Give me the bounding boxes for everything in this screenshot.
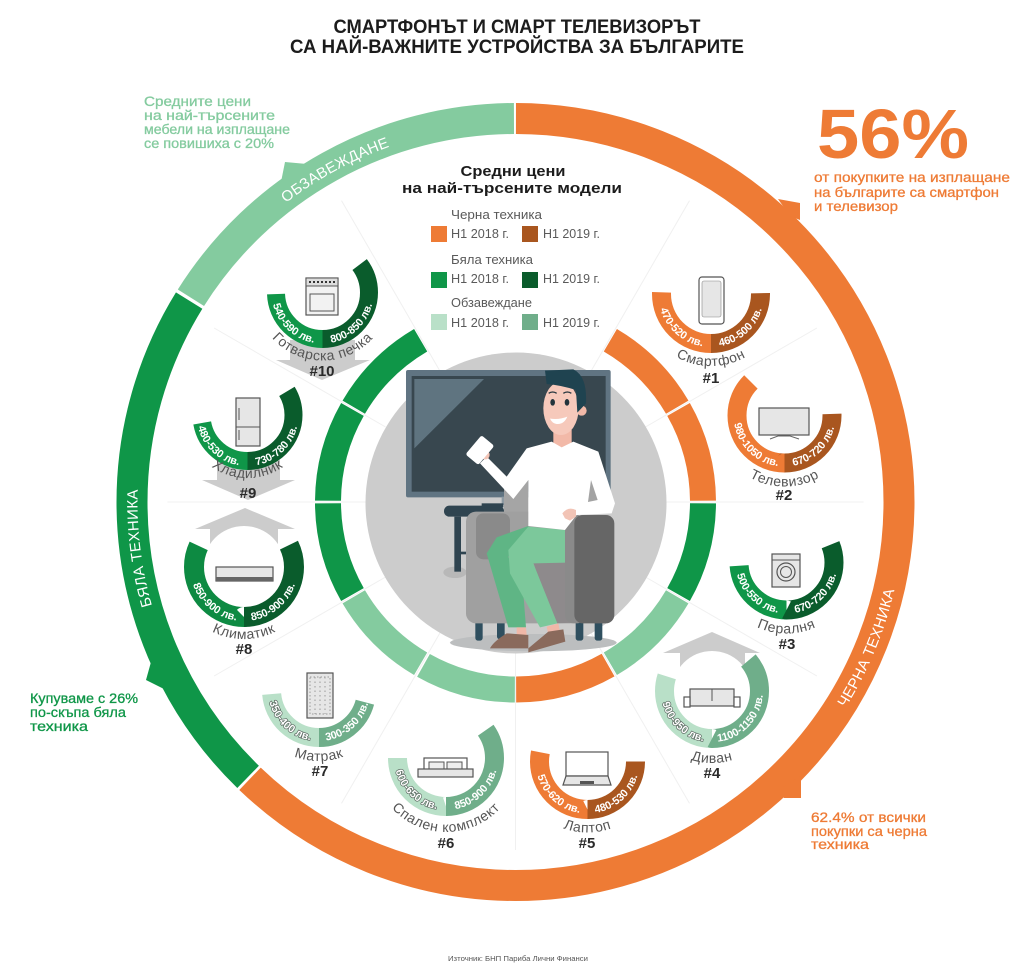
item #8 климатик: 850-900 лв. xyxy=(194,582,236,620)
callout: 26%: техника xyxy=(30,718,88,734)
gray circle backdrop xyxy=(366,352,666,654)
item #4 диван: Диван xyxy=(690,751,732,765)
item #1 смартфон xyxy=(652,276,770,387)
icon: sofa xyxy=(684,689,740,707)
callout: 62.4%: 62.4% от всички xyxy=(811,809,926,825)
legend: обзавеждане xyxy=(431,296,600,330)
item #7 матрак: 300-350 лв. xyxy=(325,704,368,740)
title: СМАРТФОНЪТ И СМАРТ ТЕЛЕВИЗОРЪТ xyxy=(334,17,701,38)
legend: бяла техника: H1 2019 г. xyxy=(543,272,600,286)
inner segmented ring xyxy=(328,314,703,690)
item #8 климатик: Климатик xyxy=(213,623,276,640)
ring segment: черна техника: ЧЕРНА ТЕХНИКА xyxy=(837,590,894,704)
item #6 спален комплект: Спален комплект xyxy=(394,803,498,832)
callout: 26%: Купуваме с 26% xyxy=(30,690,138,706)
legend heading xyxy=(402,163,622,197)
item #6 спален комплект: 600-650 лв. xyxy=(396,768,437,810)
arrow: down xyxy=(276,340,370,380)
title xyxy=(290,17,744,58)
legend heading: на най-търсените модели xyxy=(402,180,622,197)
callout: 26%: по-скъпа бяла xyxy=(30,704,126,720)
ring segment: черна техника xyxy=(239,103,914,901)
item #7 матрак xyxy=(262,672,374,780)
item #3 пералня xyxy=(730,541,844,653)
callout: 56%: от покупките на изплащане xyxy=(814,169,1010,185)
item #9 хладилник: 480-530 лв. xyxy=(198,426,238,466)
item #4 диван: #4 xyxy=(704,765,721,782)
legend: обзавеждане: Обзавеждане xyxy=(451,296,532,310)
arrow: down xyxy=(202,460,295,500)
item #9 хладилник xyxy=(193,386,302,502)
item #8 климатик: 850-900 лв. xyxy=(251,584,295,620)
item #7 матрак: #7 xyxy=(312,763,328,780)
item #1 смартфон: 470-520 лв. xyxy=(661,308,702,346)
illustration: man with phone in front of TV xyxy=(406,369,617,652)
item #1 смартфон: Смартфон xyxy=(678,350,745,369)
item #2 телевизор: 980-1050 лв. xyxy=(734,422,778,466)
arrow: up xyxy=(663,632,760,680)
icon: fridge xyxy=(236,398,260,446)
legend: бяла техника xyxy=(431,253,600,288)
item #10 готварска печка xyxy=(267,259,378,380)
legend: бяла техника: H1 2018 г. xyxy=(451,272,509,286)
icon: washing machine xyxy=(772,554,800,587)
legend: черна техника: Черна техника xyxy=(451,208,542,222)
callout: 26% xyxy=(30,690,138,734)
item #6 спален комплект: 850-900 лв. xyxy=(454,770,496,809)
item #5 лаптоп: Лаптоп xyxy=(563,820,610,832)
item #7 матрак: 350-400 лв. xyxy=(269,700,311,741)
item #2 телевизор: 670-720 лв. xyxy=(792,428,834,466)
callout: 20%: на най-търсените xyxy=(144,107,275,123)
icon: stove xyxy=(306,278,338,315)
ring segment: обзавеждане: ОБЗАВЕЖДАНЕ xyxy=(282,137,389,201)
icon: smartphone xyxy=(699,277,724,324)
item #8 климатик xyxy=(184,508,304,658)
callout: 62.4%: техника xyxy=(811,836,869,852)
item #1 смартфон: 460-500 лв. xyxy=(719,309,762,346)
legend xyxy=(402,163,622,330)
item #2 телевизор xyxy=(728,375,842,504)
legend: черна техника: H1 2018 г. xyxy=(451,227,509,241)
icon: laptop xyxy=(563,752,611,785)
legend heading: Средни цени xyxy=(460,163,566,180)
legend: обзавеждане: H1 2019 г. xyxy=(543,316,600,330)
callout: 56%: и телевизор xyxy=(814,198,898,214)
arrow: up xyxy=(195,508,295,555)
item #10 готварска печка: 800-850 лв. xyxy=(330,304,372,342)
item #1 смартфон: #1 xyxy=(703,370,719,387)
item #10 готварска печка: 540-590 лв. xyxy=(273,303,314,343)
item #5 лаптоп: 570-620 лв. xyxy=(538,774,580,813)
icon: mattress xyxy=(307,673,333,718)
item #4 диван: 1100-1150 лв. xyxy=(718,696,763,742)
callout: 56%: 56% xyxy=(817,95,969,173)
item #4 диван xyxy=(655,632,769,782)
item #3 пералня: #3 xyxy=(779,636,795,653)
ring segment: бяла техника xyxy=(116,292,259,788)
item #10 готварска печка: #10 xyxy=(309,363,335,380)
legend: черна техника xyxy=(431,208,600,242)
item #9 хладилник: 730-780 лв. xyxy=(255,427,297,465)
item #6 спален комплект xyxy=(388,724,504,852)
callout: 20%: Средните цени xyxy=(144,93,251,109)
item #2 телевизор: #2 xyxy=(776,487,792,504)
callout: 20%: се повишиха с 20% xyxy=(144,135,274,151)
item #9 хладилник: #9 xyxy=(240,485,256,502)
legend: обзавеждане: H1 2018 г. xyxy=(451,316,509,330)
item #5 лаптоп xyxy=(530,750,645,852)
callout: 20% xyxy=(144,93,290,151)
icon: air conditioner xyxy=(216,567,273,581)
callout: 20%: мебели на изплащане xyxy=(144,121,290,137)
item #3 пералня: Пералня xyxy=(758,618,815,636)
item #5 лаптоп: #5 xyxy=(579,835,595,852)
outer ring: categories xyxy=(116,103,914,901)
item #5 лаптоп: 480-530 лв. xyxy=(595,776,638,812)
item #3 пералня: 500-550 лв. xyxy=(737,573,778,613)
item #4 диван: 900-950 лв. xyxy=(662,700,704,742)
callout: 56% xyxy=(814,95,1010,214)
callout: 62.4%: покупки са черна xyxy=(811,823,927,839)
icon: TV xyxy=(759,408,809,439)
source: Източник: БНП Париба Лични Финанси xyxy=(448,954,588,963)
item #2 телевизор: Телевизор xyxy=(752,468,818,486)
callout: 56%: на българите са смартфон xyxy=(814,184,999,200)
legend: бяла техника: Бяла техника xyxy=(451,253,533,267)
ring segment: обзавеждане xyxy=(178,103,514,306)
item #9 хладилник: Хладилник xyxy=(212,459,283,481)
item #8 климатик: #8 xyxy=(236,641,252,658)
item #6 спален комплект: #6 xyxy=(438,835,454,852)
ring segment: бяла техника: БЯЛА ТЕХНИКА xyxy=(127,490,152,608)
item #7 матрак: Матрак xyxy=(295,748,344,764)
item #10 готварска печка: Готварска печка xyxy=(272,332,373,362)
icon: bed xyxy=(418,758,473,777)
title: СА НАЙ-ВАЖНИТЕ УСТРОЙСТВА ЗА БЪЛГАРИТЕ xyxy=(290,36,744,58)
item #3 пералня: 670-720 лв. xyxy=(794,574,836,612)
callout: 62.4% xyxy=(811,809,927,852)
legend: черна техника: H1 2019 г. xyxy=(543,227,600,241)
